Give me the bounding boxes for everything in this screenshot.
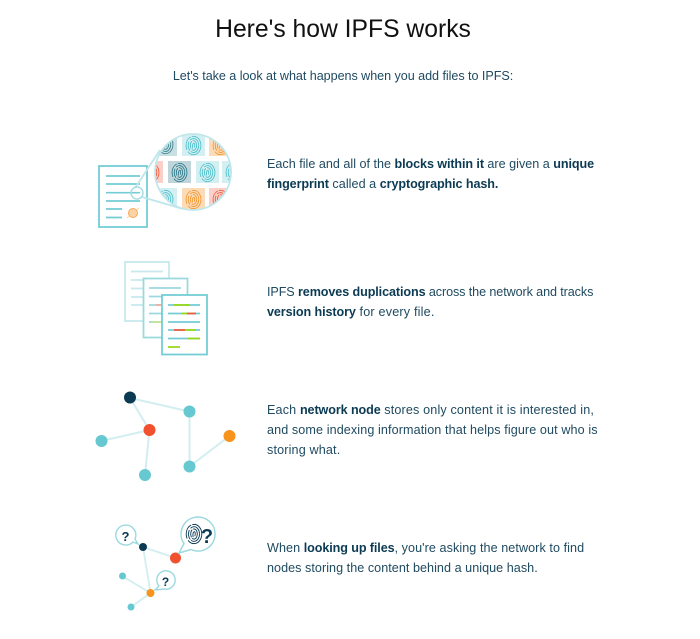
text block: network node [267,403,598,457]
icon: looking up files across nodes [116,517,215,610]
text block: fingerprint [267,157,594,191]
title: Here's how IPFS works [215,16,471,43]
text block: looking up files: When looking up files, you're asking the network to find [267,541,584,555]
text block: looking up files: nodes storing the content behind a unique hash. [267,561,538,575]
intro text: Let's take a look at what happens when you add files to IPFS: [173,69,513,83]
text block: network node: and some indexing information that helps figure out who is [267,423,598,437]
magnifier connector lines [135,150,183,209]
text block: fingerprint: Each file and all of the blocks within it are given a unique [267,157,594,171]
text block: duplicates: IPFS removes duplications across the network and tracks [267,285,593,299]
text block: duplicates: version history for every file. [267,305,435,319]
icon: file with magnified fingerprint blocks [99,134,245,227]
text block: network node: Each network node stores only content it is interested in, [267,403,594,417]
middle version [144,278,188,338]
text block: looking up files [267,541,584,575]
newest version with highlighted changes [162,295,207,354]
speech bubble: question: ? [122,529,130,544]
icon: stacked file versions [125,262,207,354]
text block: duplicates [267,285,593,319]
text block: network node: storing what. [267,443,340,457]
icon: network nodes [96,392,236,481]
speech bubble: fingerprint and question: ? [201,526,213,548]
speech bubble: small question: ? [162,575,169,589]
magnified fingerprint tiles [156,135,230,210]
oldest version [125,262,169,321]
text block: fingerprint: fingerprint called a cryptographic hash. [267,177,498,191]
document [99,166,147,227]
